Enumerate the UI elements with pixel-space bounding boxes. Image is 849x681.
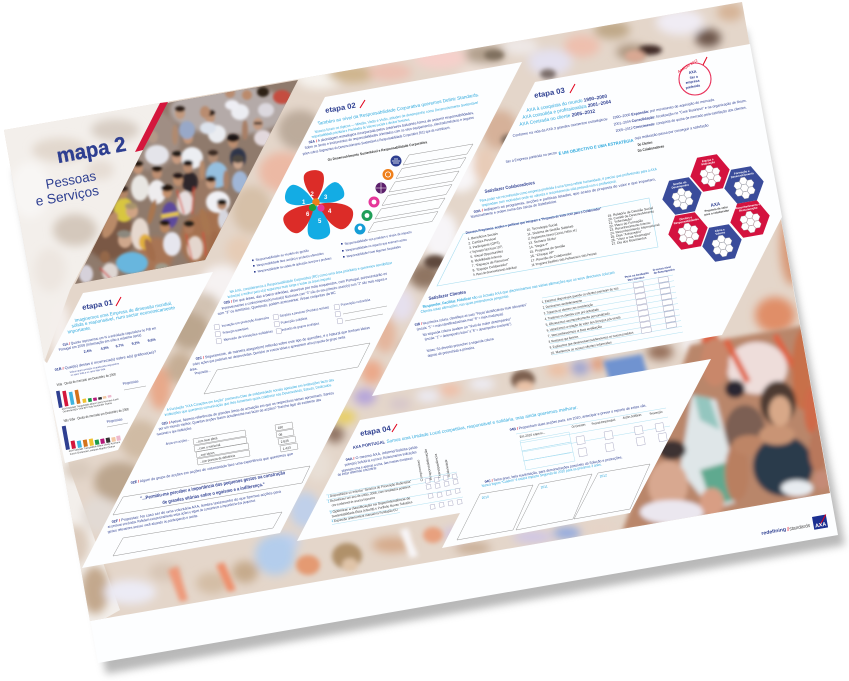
table rows: 2. Dominamos verdadeiramente — [542, 299, 582, 310]
intro text 04: AXA PORTUGAL — [352, 439, 386, 450]
intro text 02: 02A / A abordagem estratégica incorporada pelos anteriores baluartes forma de assumir responsabilidades, — [308, 111, 474, 144]
footer: redefining standards tagline — [761, 523, 811, 537]
hexagon: formação e desenvolvimento: Formação e — [734, 169, 750, 176]
question 02F: 02F / Propostas: No caso ser de uma voluntária AXA, lembra testemunho do que fizemos acções para — [111, 490, 281, 524]
timeline headings: Conforme na vida da AXA 3 grandes momentos estratégicos: — [512, 117, 608, 138]
intro text 02 — [302, 92, 479, 156]
bar chart: Vida: Vida · Quota de mercado em Dezembro de 2008 — [56, 372, 116, 387]
checkbox options: Inovação em protecção financeira — [221, 316, 269, 328]
box: 2010 — [457, 485, 533, 540]
panel shape 03 — [372, 44, 782, 396]
panel: etapa 01 — [43, 272, 213, 463]
stamp: ser a empresa preferida: empresa — [685, 79, 700, 85]
panel: etapa 04 — [297, 359, 711, 548]
bar chart: Vida — [56, 372, 146, 414]
section: satisfazer colaboradores: Satisfazer Colaboradores — [484, 180, 536, 194]
panel: etapa 03 — [372, 44, 782, 396]
intro text 01: sólida e responsável, num sector economicamente — [71, 305, 176, 328]
box: 2011 — [516, 474, 592, 530]
question 01A: 9.6% — [147, 337, 157, 343]
indicator list: 2 Reconhecer um ano de união, 2008, com resultados positivos — [327, 485, 411, 504]
flower diagram: 1 — [302, 200, 306, 206]
indicator list — [326, 472, 463, 524]
checkbox options: Inclusão de grupos ecológica — [281, 321, 320, 332]
hexagon: clima e valores: Clima e — [714, 227, 725, 233]
subtitle: e Serviços: e Serviços — [34, 183, 100, 209]
objective statement: Do Clientes — [637, 140, 653, 147]
lower running figures — [168, 45, 718, 602]
panel shape 02 — [82, 62, 522, 568]
box: 2012 — [574, 464, 650, 519]
intro text 04: Somos uma Unidade Local competitiva, responsável e solidária, mas ainda queremos melhorar. — [386, 405, 578, 444]
heading: etapa 03: etapa 03 — [533, 86, 566, 100]
table rows: 1. Estamos disponíveis quando os clientes precisam de nós — [541, 286, 619, 304]
section: satisfazer clientes: (escala: "1" = mais identificadas/mais mas "9" = mais mudanças) — [416, 312, 504, 332]
section: satisfazer colaboradores: Para poder ser reconhecida como empresa preferida é uma forma refletir humanidade, é preciso que profissionais para a AXA — [479, 167, 658, 203]
list of responsibilities: Responsabilidade nos produtos e níveis de impacto — [344, 230, 412, 246]
programmes box — [437, 198, 660, 286]
intro text 02: Também ao nível da Responsabilidade Corporativa queremos Definir Standards. — [317, 92, 479, 126]
question 02D: 2.625 — [280, 439, 289, 444]
question 04B: Em 2010 espero... — [519, 430, 546, 439]
slash 03 — [570, 84, 575, 93]
icon column with answer boxes — [354, 144, 473, 234]
question 02C — [189, 326, 370, 394]
question 02D: ...com idosos — [198, 451, 215, 458]
stamp: ser a empresa preferida — [677, 57, 711, 95]
programmes list column 2: 15. Programa de Gestão — [529, 244, 566, 254]
slash 04 — [392, 424, 397, 432]
programmes list column 1: 2. Cartões Pessoal — [468, 237, 496, 246]
question 01A — [58, 326, 157, 354]
bar chart: Não Vida: AXA Fidelidade Tranquilidade Allianz Liberty Açoreana — [68, 441, 121, 453]
section: satisfazer clientes — [414, 271, 615, 358]
programmes list column 1: 6. Mobilidade Interna — [471, 254, 502, 264]
logo: AXA — [812, 515, 828, 530]
question 02D: 02D / Apesar, fizemos referências de grandes áreas de actuação em que os respectivos temas aproximam. Santos — [161, 391, 334, 426]
section: satisfazer clientes: Na segunda coluna avaliem ao "nível de maior desempenho" — [422, 317, 512, 337]
section: satisfazer clientes: Responder, Facilitar, Fidelizar são os Actuais AXA que discriminamos nas várias afirmações que os seus directores colocam — [422, 271, 615, 309]
table rows: 5. Oferecemos acompanhamento personalizado — [545, 311, 610, 327]
hexagon: reconhecimento e remuneração: Reconhecimento e — [735, 202, 761, 210]
hexagon: equipa e motivação: Motivação — [701, 160, 716, 166]
photo: bright crowd of runners — [75, 80, 298, 284]
section: satisfazer clientes: (escala: "1" = desempenho baixo" a "6" = desempenho excelente") — [424, 322, 512, 342]
timeline headings: AXA à conquista do mundo 1990–2000 — [526, 94, 608, 114]
question 02C: 02C / Seguramente, de maneira alargar(em) reflexão sobre este tipo de questões, é o Natural que tenham ideias — [195, 326, 370, 361]
programmes list column 3: 25. Dias "Aniversário" — [610, 229, 643, 239]
question 02B: 02B / Em que áreas, das a baixo referidas, descreve por mais esquecidos, com Portugal, acrescentarão os — [223, 272, 388, 305]
question 01A: 01A / Quanto representou em % a actividade seguradora no PIB em — [62, 326, 156, 347]
question 02D: instituições que queremos comunicação que lhes fomentam quais colaborar nas Desenvolvido, Estudo, Dedicados. — [164, 383, 332, 417]
programmes list column 2: 16. "Cheque AP" — [530, 250, 556, 258]
client satisfaction table: de desempenho — [653, 267, 675, 275]
table rows: 4. Tratamos os clientes com pró-actividade — [544, 307, 599, 321]
hexagon: gestão do desempenho — [659, 175, 705, 217]
question 04B: 04B / Proponham duas acções para, em 2010, antecipar e prever o reporte de estas vãs. — [509, 403, 647, 432]
hexagon: formação e desenvolvimento: Desenvolvimento — [730, 171, 754, 179]
heading: etapa 04: etapa 04 — [359, 424, 392, 438]
question 02F: as pessoas envolvidas. Refletiam excepcionalmente estas ações e sigam de consumirem a importância dos pequenos — [107, 498, 256, 529]
bar chart: Vida: Propostas — [122, 379, 139, 386]
question 01A: 9.2% — [131, 340, 141, 346]
table rows: 6. Valorizamos a relação de valor dos Serviços pós-venda — [546, 315, 621, 332]
chart heading: Os Desenvolvimento Sustentável e Responsabilidade Corporativa — [327, 140, 427, 162]
programmes box: Diversos Programas, acções e políticas que integram a "Proposta de Valor AXA para o Colaborador" — [465, 207, 602, 235]
question 02B — [217, 261, 393, 316]
client satisfaction table: Peso na Avaliação — [624, 271, 649, 279]
question 02D: 180 — [277, 425, 284, 430]
list of responsibilities — [252, 230, 412, 274]
question 01A: 6.7% — [115, 343, 125, 348]
programmes list column 2: 10. Tecnologia Social — [526, 223, 558, 232]
hexagon centre label: AXA — [710, 201, 721, 208]
question 01A: 4.9% — [100, 345, 110, 351]
checkbox options — [214, 298, 387, 344]
indicator list: 1 Disponibilizar os estudos "Sinistros de Prevenção Rodoviária" — [327, 479, 412, 498]
question 02D: 08 — [278, 432, 283, 437]
strategic moments: 2005–2012 Crescimento: conquista de quota de mercado pela satisfação dos clientes. — [615, 106, 747, 133]
bar chart: Não Vida: Não Vida · Quota de mercado em Dezembro de 2008 — [63, 407, 129, 423]
objective statement: É UM OBJECTIVO E UMA ESTRATÉGIA — [558, 138, 634, 156]
footer: redefining standards tagline: standards — [789, 523, 811, 532]
section: satisfazer clientes: Notas: Só deverão preencher a segunda coluna — [426, 337, 494, 353]
flower diagram — [280, 169, 357, 241]
table rows: 7. Reconhecemos a boa avaliação — [547, 324, 602, 338]
question 02F — [107, 490, 282, 556]
question 02E with quote: "...Permitiu-me perceber a importância dos pequenos gestos na construção — [140, 470, 286, 502]
hexagon: formação e desenvolvimento — [721, 164, 767, 206]
question 04A: de estar referindo encontrar. — [337, 466, 377, 477]
question 04B: Pessoal Responsável — [591, 418, 616, 426]
question 02B: com "3" os territórios. Querendo, podem acrescentar. Áreas conjuntas da RC — [217, 291, 336, 316]
title block — [34, 133, 128, 209]
question 02D: A Fundação "AXA Corações em Acção" promoveu Dias de solidariedade sociais apoiadas em instituições facto das — [166, 378, 334, 412]
question 02E with quote — [113, 452, 310, 515]
heading: etapa 01: etapa 01 — [81, 298, 114, 312]
question 02E with quote: de grandes vitórias sobre o egoísmo e a indiferença." — [162, 482, 265, 506]
intro text 02: responsabilidade prioritária e Prioridades de Valores sociais e direitos humanos. — [311, 117, 410, 139]
hexagon: equipa e motivação: Equipa e — [702, 157, 714, 163]
logo: AXA: AXA — [815, 522, 827, 530]
flower diagram: 2 — [310, 192, 314, 198]
title: mapa 2: mapa 2 — [55, 133, 128, 168]
intro text 02: pelos outros Segmentos do Desenvolvimento Sustentável e Responsabilidade Corporativa (RC) que de contribuem. — [302, 126, 451, 156]
hexagon: gestão do desempenho: Gestão do — [673, 180, 687, 186]
rotated column headers: Solidariedade — [444, 459, 451, 478]
question 02D: Áreas em acções... — [165, 438, 190, 446]
question 04B: Acções Solidárias — [622, 413, 642, 420]
question 02B: NA AXA, consideramos a Responsabilidade Corporativa (RC) como uma área prioritária e queremos sensibilizar — [229, 261, 393, 294]
question 02D: nacionais e que instituições. — [156, 426, 192, 436]
question 02D — [156, 378, 334, 465]
panel shape 04 — [297, 359, 711, 548]
section: satisfazer clientes: Clientes estas afirmações, nas quais pretendemos perguntas. — [420, 294, 510, 314]
timeline headings — [512, 94, 612, 138]
heading: etapa 02: etapa 02 — [324, 101, 357, 115]
hexagon centre label: Proposta de valor — [704, 205, 729, 213]
question 02F: gestos relevantes acesso você atuando ou participando e aceite. — [107, 514, 199, 534]
hexagon: reconhecimento e remuneração: Remuneração — [739, 206, 758, 213]
panel shape 01 — [43, 272, 213, 463]
table rows: 9. Explicamos que desenvolvemos/oferecemos os nossos produtos — [549, 331, 634, 350]
question 04C: Nunca fogem "Cuidem" é estará impacto Segunda de 2010 para os próximos 3 anos. — [481, 462, 602, 488]
list of responsibilities: Responsabilidade Fazer Algumas Sociedades — [346, 245, 401, 258]
question 02B: todos(as) e melhor para o(a) segurança mais longe e todas as áreas impacto — [227, 276, 331, 299]
section: satisfazer clientes: Satisfazer Clientes — [428, 289, 467, 301]
programmes list column 2: 11. Sistema de Gestão Salariais — [527, 224, 574, 236]
flower diagram: 3 — [324, 195, 328, 201]
flower diagram: 6 — [306, 212, 310, 218]
checkbox options: Prevenção rodoviária — [340, 298, 371, 307]
hexagon: gestão do desempenho: Desempenho — [671, 183, 690, 190]
question 04A: pelos(as) Solicitá-la e provar. Relacionamos indicações — [344, 450, 417, 467]
programmes list column 2 — [526, 223, 597, 267]
table rows: 10. Mantemos os nossos clientes informados — [550, 340, 612, 355]
question 01B: no ramo Vida e no ramo Não Vida — [70, 368, 106, 377]
question 01B: Indicar qual a posição ocupada pela seguradora — [69, 362, 120, 374]
hexagon centre label: para o colaborador — [704, 208, 731, 217]
rotated column headers: Transparência — [434, 453, 442, 479]
strategic moments: 1990–2000 Expansão: por movimento de aquisição de mercado. — [612, 98, 715, 120]
programmes list column 3: 20. Comité de Desenvolvimento — [608, 209, 655, 222]
intro text 02: Nossos foram os tópicos — Missão, Visão e Visão, atitudes de desempenho como Desenvolvimento Sustentável — [314, 101, 479, 134]
programmes list column 1: 3. Participants (GPS) — [469, 241, 500, 250]
programmes list column 3: 19. Relatório de Decisão Social — [607, 206, 654, 218]
programmes list column 2: 14. "Regra 4" — [529, 242, 549, 250]
programmes list column 1: 4. "Segmentation Talent Houses" (GTF) — [469, 245, 503, 254]
stamp: ser a empresa preferida: AXA — [688, 70, 697, 75]
question 02D: ...com seus afinal — [195, 436, 218, 444]
bar chart: Vida: Ocidental BES Vida BPI Vida Santander Outras — [62, 402, 113, 414]
programmes list column 2: 13. Semana Sénior — [528, 236, 557, 245]
indicator list: 4 Expansão anteriorment manual na Fundação CU — [331, 508, 398, 524]
question 02C: Propostas... — [194, 369, 211, 376]
client satisfaction table — [541, 265, 683, 355]
intro text 01 — [67, 301, 176, 334]
programmes list column 2: 12. Regulamentos Internos (Carreira, Política, etc.) — [527, 228, 577, 241]
stamp: ser a empresa preferida: Ambição 2012 — [677, 58, 698, 74]
programmes list column 3: 21. "Informação" — [608, 217, 634, 225]
checkbox options: Protecção solidária — [280, 316, 308, 325]
checkbox options: Sanções a pessoas (Produtos sociais) — [279, 305, 329, 318]
programmes list column 2: 17. Reunião de Colaborador — [530, 251, 573, 263]
section: satisfazer clientes: 03B / Na primeira coluna, classifique as suas "Peças identificativas mais relevantes" — [414, 303, 528, 327]
question 04C: 04C / Tomo anos, bela sustentação, para demonstrações possíveis da Solução e protecções. — [484, 455, 623, 484]
question 02D: 1.423 — [282, 446, 291, 451]
list of responsibilities: Responsabilidade no impacto que exercem acima — [345, 238, 407, 252]
table checkboxes — [633, 276, 677, 334]
programmes list column 1: 9. Plano de desenvolvimento individual — [473, 265, 517, 277]
box: 2010: 2010 — [481, 495, 489, 500]
intro text 01: Imaginemos uma Empresa de dimensão mundial, — [74, 301, 172, 323]
client satisfaction table: Dos Clientes — [627, 275, 645, 282]
hexagon: direitos e responsabilidades — [665, 210, 711, 252]
section: satisfazer colaboradores: respondam com motivados onde se valoriza e reconhecendo vida pessoal com o profissional. — [481, 179, 617, 208]
timeline headings: AXA consolida e profissionaliza 2001–2004 — [522, 99, 612, 121]
section: satisfazer colaboradores — [470, 167, 658, 219]
question 04B: Prevenção — [649, 410, 663, 416]
slash 01 — [116, 297, 121, 306]
question 01B: 01B / Qual(is) destas é incorrecta(s) sobre a(s) gráficos(as)? — [54, 350, 156, 372]
question 02D: ...com o nacional — [196, 443, 221, 451]
box: 2011: 2011 — [540, 484, 548, 490]
subtitle: Pessoas: Pessoas — [44, 168, 97, 192]
hexagon diagram — [659, 152, 773, 264]
flower diagram: 4 — [328, 209, 332, 215]
rotated column headers: Responsabilização — [423, 448, 433, 481]
bar chart: Não Vida: Propostas — [106, 417, 123, 424]
strategic moments: 2001–2004 Consolidação: focalização no "Core Business" e na organização de fórum. — [613, 99, 747, 126]
objective statement: Do Colaboradores — [637, 144, 665, 153]
checkbox options: Protecção sustentável — [222, 326, 249, 335]
table rows: 8. Mostramos que fazemos — [548, 335, 579, 344]
question 02B: Impressionantes e conhecimentos(s) nossa(s) Nacionais com "3" são do seu primeiro acaso(s) com "2" são mais segura e — [221, 277, 387, 310]
programmes list column 1: 5. Visual Opportunities — [470, 249, 504, 259]
flower diagram: 5 — [318, 219, 322, 225]
client satisfaction table: O nosso nível — [652, 265, 671, 272]
hexagon: reconhecimento e remuneração — [727, 198, 773, 240]
indicator list: com recolhimento de recursos financeiros — [331, 496, 376, 508]
stamp: ser a empresa preferida: Ser a — [689, 75, 698, 80]
question 02C: área. — [189, 367, 198, 372]
list of responsibilities: Responsabilidade na cadeia de aplicação serviços e produtos — [257, 256, 332, 274]
footer: redefining standards tagline: / — [787, 527, 790, 533]
footer: redefining standards tagline: redefining — [761, 527, 787, 537]
question 01A: 2.4% — [83, 348, 93, 354]
rotated column headers — [416, 448, 451, 482]
panel: etapa 02 — [82, 62, 522, 568]
question 04A — [337, 445, 418, 477]
intro text 01: importante. — [67, 325, 92, 334]
programmes list column 2: 18. Programa Equilíbrio Vida Profissional e Vida Pessoal — [531, 252, 597, 267]
hexagon: clima e valores: Valores — [715, 230, 726, 236]
bar chart: Não Vida — [62, 407, 129, 456]
red diagonal bar beside title — [135, 102, 168, 152]
question 01A: Portugal em 2008 (Informação em sítio a máxima certa) — [58, 333, 142, 352]
programmes list column 3 — [607, 206, 660, 246]
objective statement — [505, 123, 709, 164]
programmes list column 1: 8. "Espaço Colaborador" — [472, 262, 509, 272]
question 02D: ...com pessoas de deficiência — [199, 454, 236, 464]
hexagon: equipa e motivação — [687, 152, 733, 194]
question 04A: planeiam uma e apenas a uma, das nossas monitoras — [341, 456, 413, 473]
timeline headings: AXA Centrada no cliente 2005–2012 — [519, 108, 596, 128]
slash 02 — [360, 100, 365, 108]
indicator checkboxes — [425, 474, 462, 509]
hexagon: direitos e responsabilidades: Responsabilidades — [673, 217, 700, 225]
programmes list column 3: 23. Reconhecimento Interno — [609, 221, 651, 232]
programmes list column 1: 7. "Espaços de Recursos" — [471, 257, 510, 268]
list of responsibilities: Responsabilidade ao modelo de gestão — [255, 248, 309, 262]
bar chart: Vida: AXA Fidelidade Tranquilidade Allianz Liberty Açoreana Zurich — [61, 398, 120, 411]
section: satisfazer clientes: depois de preenchida a primeira. — [427, 346, 475, 358]
section: satisfazer colaboradores: 03A / Indiquem os programas, acções e políticas listados, que acaso de proposta de valor e que importam, — [473, 177, 656, 214]
box: 2012: 2012 — [599, 473, 607, 478]
question 02C: sobre ações que poderiam ser desenvolvidas. Queridos os vossos ideias e apresentem uma proposta de grupo nesta — [192, 335, 346, 366]
programmes list column 3: 27. Dia dos Movimentos — [611, 236, 647, 246]
intro text 02: Sobre os Seres e instrumentos de responsabilidades orientados com os seus equipamentos, electrodomésticos e seguros — [304, 116, 474, 150]
photo: large foreground runners, lower right — [622, 325, 834, 532]
checkbox options: Mercado de iniciações solidárias — [223, 329, 274, 342]
table rows: 3. Tratamos os clientes com consideração — [543, 303, 593, 315]
stamp: ser a empresa preferida: preferida — [685, 83, 700, 90]
indicator list: Sustentabilidade Ética (efso08) e Portfolio Novas Soluções — [331, 499, 413, 518]
objective statement: cuja realização passa por conseguir a satisfação — [634, 123, 709, 140]
programmes list column 1: 1. Benefícios Sociais — [467, 232, 498, 241]
rotated column headers: Compromisso — [416, 459, 424, 482]
question 02E with quote: 02E / Algum do grupo de acções em acções de voluntariado face uma experiência que queremos que — [130, 452, 293, 485]
bar chart: Não Vida: Zurich Ocidental Lusitania Mapfre Outras — [69, 445, 116, 456]
indicator list: 3 Optimizar a classificação na Superintendência de — [329, 496, 411, 514]
table rows — [541, 286, 634, 355]
programmes list column 1 — [467, 232, 517, 277]
question 04A: 04A / O mesmo AXA, informe/Solicita pelas — [345, 445, 418, 462]
list of responsibilities: Responsabilidade face aos(às) e produtos oferecidos — [256, 251, 324, 268]
section: satisfazer colaboradores: Nacionalmente e ordem numa das caixas de Satisfatórios — [470, 200, 557, 219]
question 02D: por um mundo melhor. Quantas acções fazem actualmente nas fazer de acções? Tranche ligar de existente das — [158, 398, 322, 431]
programmes list column 3: 26. "Viver a rua Vicemagro" — [611, 231, 652, 242]
hexagon: clima e valores — [699, 222, 745, 264]
question 04B — [509, 403, 670, 470]
objective statement: Ser a Empresa preferida no sector — [505, 151, 558, 164]
programmes list column 3: 22. Plano de Formação — [609, 218, 643, 228]
programmes list column 3: 24. Reconhecimento Internacional — [610, 223, 660, 236]
hexagon centre label — [702, 200, 731, 217]
question 04B: Os Gerentes — [571, 423, 586, 429]
hexagon: direitos e responsabilidades: Direitos e — [679, 215, 693, 221]
